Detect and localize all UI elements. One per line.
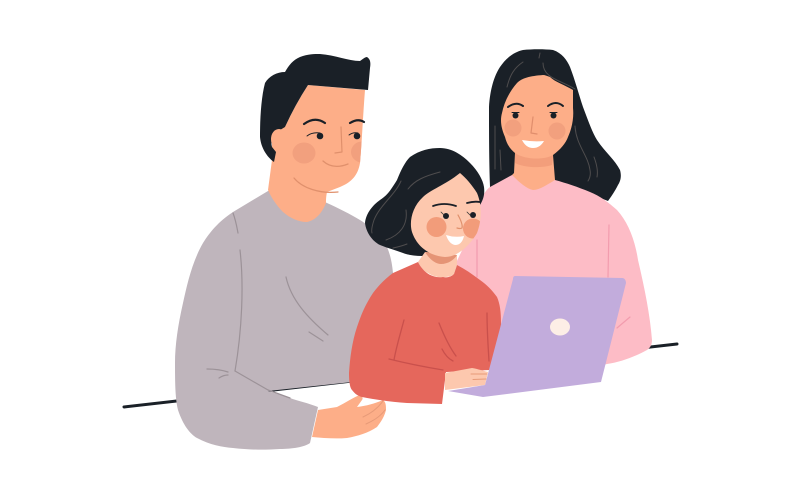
man nose <box>335 127 342 153</box>
illustration: family looking at a laptop <box>122 49 678 450</box>
woman hair strands <box>495 53 597 181</box>
girl cheeks <box>426 217 483 238</box>
woman hair <box>489 49 621 201</box>
girl face <box>411 173 481 257</box>
woman face and neck <box>501 75 573 190</box>
man cheeks <box>292 142 362 164</box>
girl sweater <box>349 262 502 404</box>
man fingers <box>363 401 385 424</box>
laptop body <box>448 276 626 397</box>
girl hair <box>365 148 484 256</box>
man mouth <box>323 161 348 166</box>
woman sweater folds <box>477 225 630 328</box>
man hand <box>312 395 386 438</box>
table line <box>124 344 677 407</box>
man hair <box>260 54 370 162</box>
woman cheeks <box>504 120 566 140</box>
laptop <box>448 276 626 397</box>
woman eyes and brows <box>508 103 563 118</box>
woman sweater <box>456 175 652 366</box>
man sweater <box>175 190 400 450</box>
man chin line <box>294 178 338 192</box>
girl eyes and brows <box>433 202 480 219</box>
girl hair strands <box>372 172 440 248</box>
woman smile <box>522 140 544 148</box>
girl hand <box>445 368 488 390</box>
man <box>175 54 400 450</box>
girl sweater folds <box>389 313 489 370</box>
man neck and face <box>268 85 365 222</box>
girl neck shadow <box>425 252 457 264</box>
man ear <box>271 129 287 149</box>
girl fingers <box>471 374 487 380</box>
man eyes and brows <box>304 120 364 139</box>
woman <box>456 49 652 366</box>
girl <box>349 148 502 404</box>
woman nose <box>531 117 537 134</box>
girl neck <box>418 252 457 277</box>
girl smile <box>446 235 464 245</box>
girl nose <box>457 215 462 228</box>
laptop logo <box>550 318 570 336</box>
woman neck shadow <box>515 153 553 167</box>
man sweater folds <box>207 213 328 398</box>
